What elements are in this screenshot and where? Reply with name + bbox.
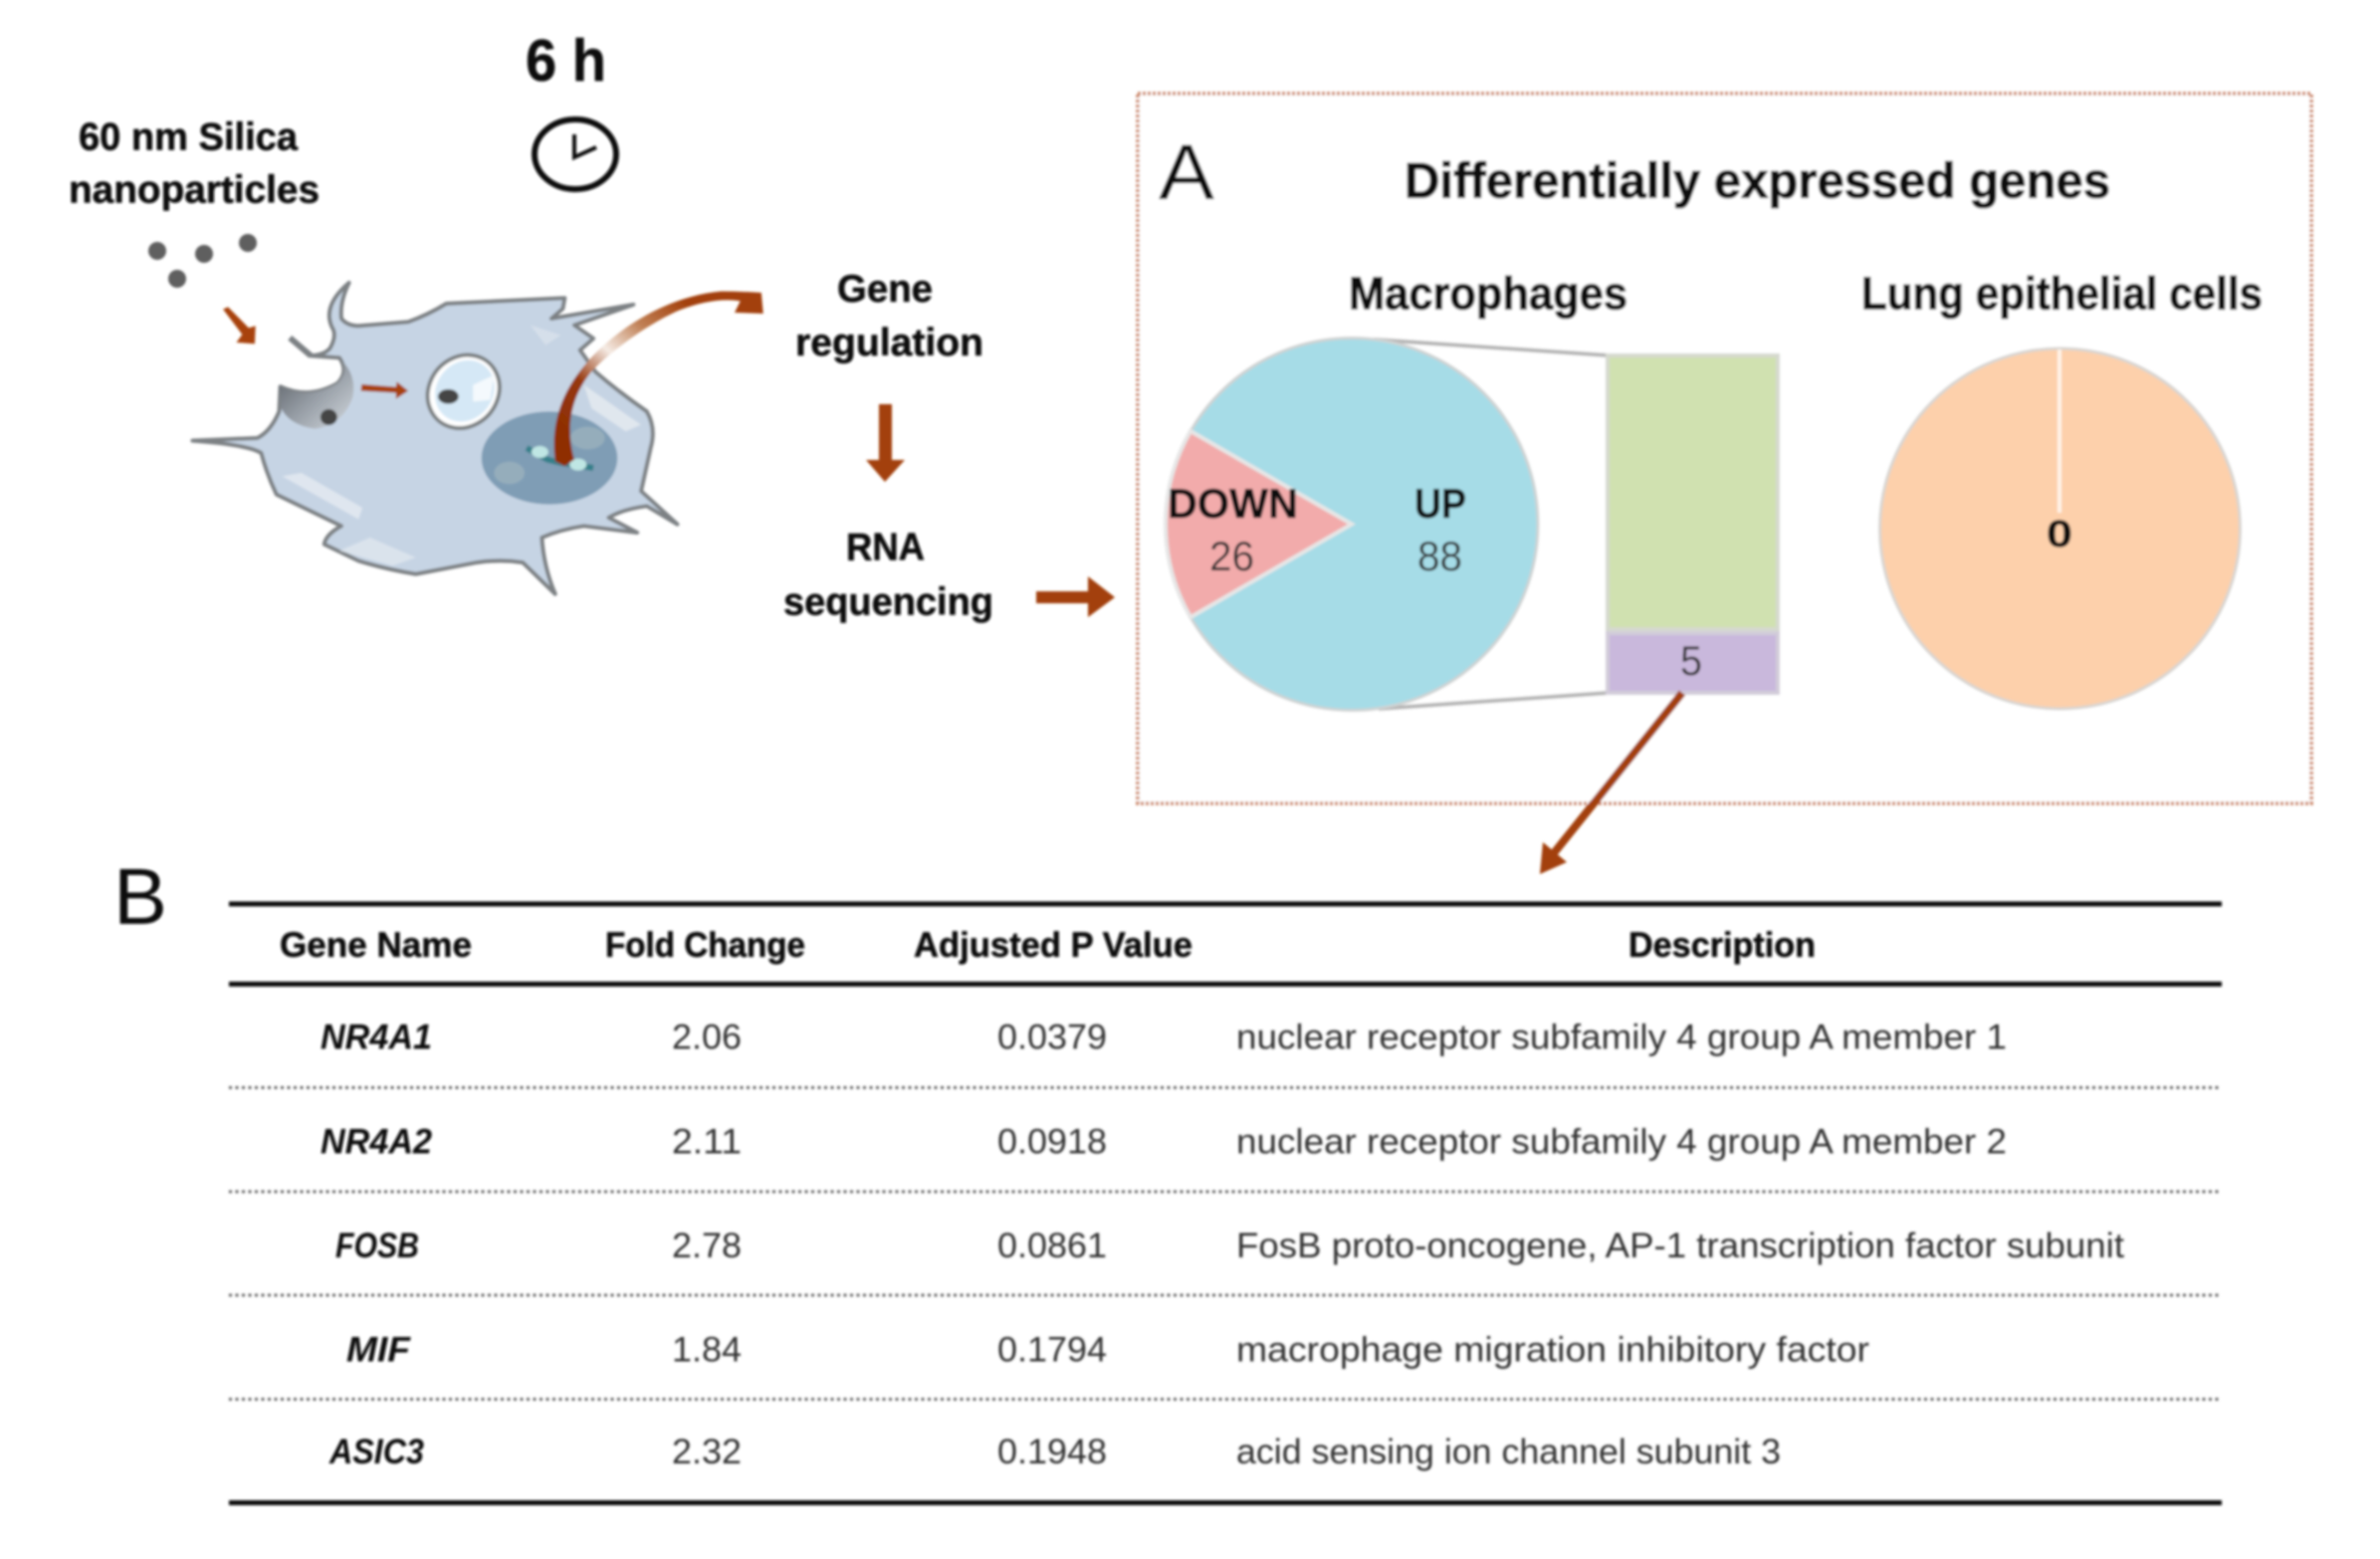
row: FOSB: 2.78 <box>672 1226 742 1265</box>
stacked bar: breakdown <box>1608 355 1778 693</box>
label: DOWN 26: DOWN <box>1168 480 1298 527</box>
table header: Adjusted P Value <box>914 926 1192 965</box>
table header: Description <box>1628 926 1816 965</box>
row: NR4A2: 0.0918 <box>997 1123 1107 1161</box>
arrow: to panel A <box>1036 576 1115 617</box>
label: 60 nm Silica nanoparticles <box>69 115 320 211</box>
heading: Macrophages: Macrophages <box>1349 267 1627 319</box>
row: FOSB <box>335 1226 2124 1265</box>
row: ASIC3: ASIC3 <box>328 1433 424 1471</box>
panel letter B: B <box>113 852 167 941</box>
row: NR4A1: 0.0379 <box>997 1017 1107 1057</box>
label: 60 nm Silica nanoparticles: nanoparticles <box>69 169 320 211</box>
row: FOSB: FOSB <box>335 1226 419 1265</box>
row: NR4A2: NR4A2 <box>321 1123 433 1161</box>
label: RNA sequencing: RNA <box>846 526 925 569</box>
arrow: entry into cell <box>223 307 256 343</box>
row: ASIC3 <box>328 1433 1781 1471</box>
row: ASIC3: 0.1948 <box>997 1433 1107 1471</box>
row: NR4A1: nuclear receptor subfamily 4 group A member 1 <box>1236 1017 2007 1057</box>
label: UP 88: UP <box>1414 480 1466 527</box>
row: MIF <box>346 1330 1869 1370</box>
arrow: to table <box>1540 693 1682 874</box>
icon: clock <box>535 119 616 189</box>
row: NR4A2: 2.11 <box>672 1123 742 1161</box>
pie chart: lung epithelial cells <box>1879 348 2240 709</box>
row: MIF: macrophage migration inhibitory factor <box>1236 1330 1869 1370</box>
label: RNA sequencing: sequencing <box>783 581 993 623</box>
row: ASIC3: acid sensing ion channel subunit 3 <box>1236 1433 1781 1471</box>
icon: nanoparticles <box>148 234 257 288</box>
label: Gene regulation: Gene <box>837 268 933 311</box>
row: FOSB: 0.0861 <box>997 1226 1107 1265</box>
connector lines <box>1374 339 1608 709</box>
label: 60 nm Silica nanoparticles: 60 nm Silica <box>79 115 298 159</box>
pie chart: macrophages <box>1166 338 1538 711</box>
arrow: vesicle movement <box>361 381 408 399</box>
label: DOWN 26 <box>1168 480 1298 579</box>
table header: Gene Name <box>280 926 472 965</box>
label: DOWN 26: 26 <box>1209 533 1254 579</box>
panel heading: Differentially expressed genes <box>1405 153 2110 209</box>
row: MIF: 1.84 <box>672 1330 742 1370</box>
label: RNA sequencing <box>783 526 993 623</box>
row: NR4A1: NR4A1 <box>321 1017 432 1057</box>
pie chart: lung epithelial cells: 0 <box>2047 514 2072 556</box>
label: UP 88: 88 <box>1417 533 1462 579</box>
row: NR4A1 <box>321 1017 2007 1057</box>
label: UP 88 <box>1414 480 1466 579</box>
stacked bar: breakdown: 5 <box>1680 637 1702 684</box>
row: FOSB: FosB proto-oncogene, AP-1 transcription factor subunit <box>1236 1226 2124 1265</box>
panel A: differentially expressed genes <box>1138 94 2311 803</box>
arrow: down to RNA sequencing <box>866 404 905 482</box>
panel letter A: A <box>1159 127 1214 216</box>
label: Gene regulation <box>795 268 983 364</box>
row: MIF: MIF <box>346 1330 412 1370</box>
table header: Fold Change <box>605 926 805 965</box>
row: NR4A2: nuclear receptor subfamily 4 group A member 2 <box>1236 1123 2007 1161</box>
row: ASIC3: 2.32 <box>672 1433 742 1471</box>
arrow: nucleus to gene regulation <box>554 292 763 466</box>
row: MIF: 0.1794 <box>997 1330 1107 1370</box>
illustration: macrophage cell <box>192 283 763 594</box>
label: Gene regulation: regulation <box>795 322 983 364</box>
table header <box>280 926 1816 965</box>
row: NR4A2 <box>321 1123 2007 1161</box>
table: gene list <box>229 904 2222 1503</box>
row: NR4A1: 2.06 <box>672 1017 742 1057</box>
label: 6 h: 6 h <box>526 28 606 94</box>
heading: Lung epithelial cells: Lung epithelial cells <box>1861 267 2263 319</box>
